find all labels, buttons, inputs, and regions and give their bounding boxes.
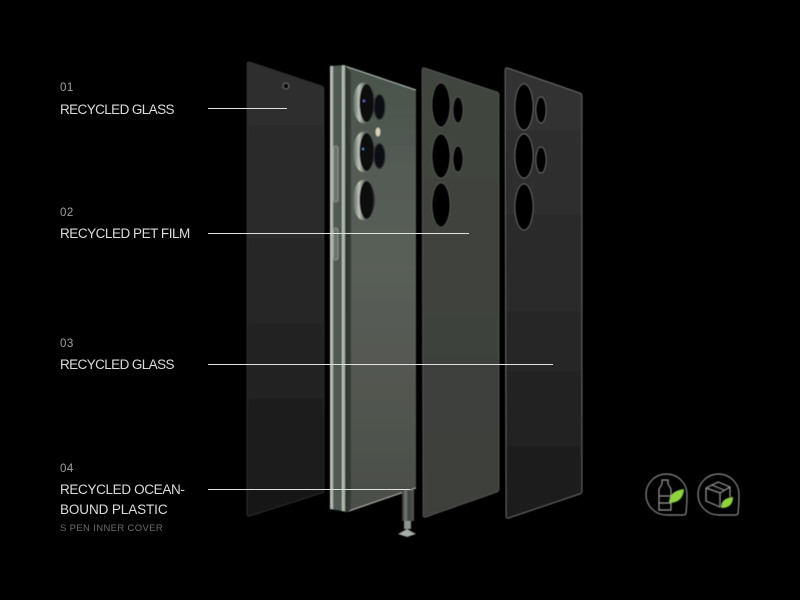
label 04 subtext: S PEN INNER COVER: [60, 523, 163, 534]
label 02 text: RECYCLED PET FILM: [60, 226, 190, 241]
flash: [376, 128, 380, 136]
label 03 text: RECYCLED GLASS: [60, 357, 174, 372]
label 04 number: 04: [60, 463, 74, 475]
label 01 text: RECYCLED GLASS: [60, 102, 174, 117]
phone side frame: [330, 65, 351, 512]
icon: recycled packaging box: [698, 474, 739, 515]
leader line 01: [208, 108, 287, 110]
panel: recycled glass front layer: [247, 62, 324, 516]
small lens 2: [374, 144, 385, 168]
phone body: [330, 65, 416, 537]
panel: recycled glass back layer: [505, 68, 582, 518]
label 01 number: 01: [60, 82, 74, 94]
S Pen: [398, 490, 416, 537]
camera lens 2: [353, 132, 375, 172]
leader line 04: [208, 488, 410, 490]
label 04 text: BOUND PLASTIC: [60, 502, 167, 517]
leader line 03: [208, 364, 553, 366]
side buttons: [334, 146, 338, 202]
label 04 text: RECYCLED OCEAN-: [60, 482, 185, 497]
label 02 number: 02: [60, 207, 74, 219]
leader line 02: [208, 232, 469, 234]
camera lens 3: [353, 180, 375, 220]
phone back: [345, 66, 416, 512]
panel: recycled PET film layer: [422, 68, 499, 517]
small lens 1: [374, 94, 385, 120]
camera lens 1: [353, 82, 375, 124]
label 03 number: 03: [60, 338, 74, 350]
label 04 text: [60, 482, 185, 517]
camera punch hole: [283, 83, 289, 89]
icon: recycled plastic bottle: [646, 474, 687, 515]
